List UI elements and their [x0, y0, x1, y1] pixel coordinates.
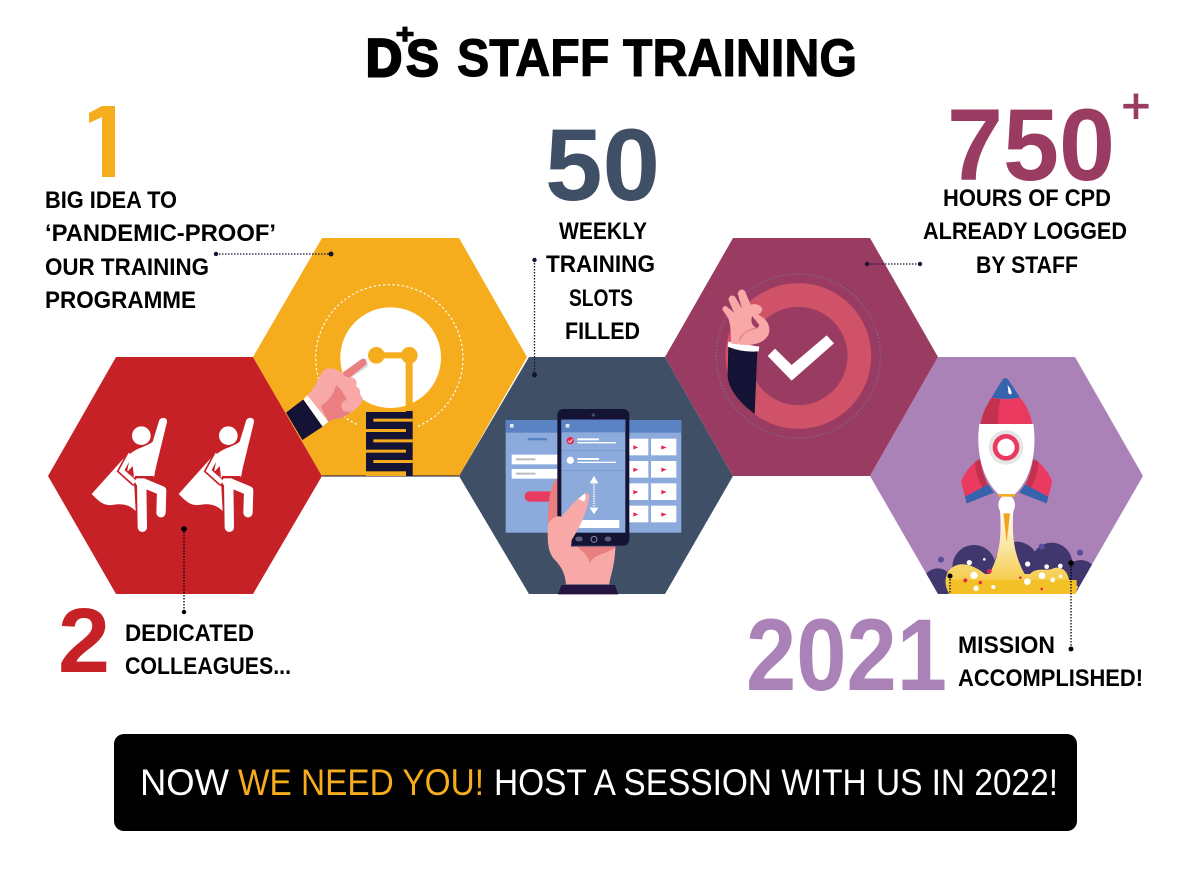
text: dedicated colleagues	[125, 620, 291, 680]
callout: number 1: 1	[78, 87, 134, 199]
text: weekly slots: FILLED	[565, 318, 640, 345]
text: CPD hours: ALREADY LOGGED	[923, 218, 1127, 245]
hexagon: purple rocket	[870, 357, 1143, 598]
logo: S	[406, 30, 439, 88]
banner: call to action	[114, 734, 1077, 831]
banner text: WE NEED YOU!	[238, 762, 484, 803]
text: mission accomplished: MISSION	[958, 632, 1055, 659]
callout: number 750 plus: +	[1121, 78, 1151, 134]
text: CPD hours	[923, 185, 1127, 279]
icon: superhero 2	[179, 418, 254, 527]
title	[366, 19, 857, 88]
text: mission accomplished: ACCOMPLISHED!	[958, 665, 1143, 692]
banner text: HOST A SESSION WITH US IN 2022!	[494, 762, 1058, 803]
icon: light bulb and hand	[286, 285, 463, 476]
callout: number 50: 50	[545, 108, 660, 222]
icon: check ring and OK hand	[716, 274, 880, 438]
icon: rocket launch	[923, 378, 1097, 598]
text: dedicated colleagues: DEDICATED	[125, 620, 254, 647]
heading text: STAFF TRAINING	[457, 29, 857, 88]
text: CPD hours: BY STAFF	[976, 252, 1078, 279]
text: big idea: OUR TRAINING	[45, 254, 209, 281]
text: weekly slots: SLOTS	[569, 285, 633, 312]
callout: number 750 plus: 750	[947, 88, 1115, 202]
text: mission accomplished	[958, 632, 1143, 692]
text: big idea: PROGRAMME	[45, 287, 196, 314]
logo: D	[366, 29, 402, 88]
hexagon: red superheroes	[48, 357, 322, 594]
callout: number 1	[89, 106, 115, 177]
logo	[366, 19, 439, 88]
connector: colleagues to hexagon	[181, 526, 187, 614]
text: weekly slots	[546, 218, 655, 345]
text: weekly slots: TRAINING	[546, 251, 655, 278]
hexagon: maroon checkmark	[665, 238, 938, 476]
text: weekly slots: WEEKLY	[559, 218, 647, 245]
connector: slots to hexagon	[532, 258, 537, 378]
connector: big idea to hexagon	[214, 252, 334, 256]
connector: mission to hexagon	[948, 560, 1074, 652]
logo: +	[396, 19, 414, 49]
hexagon: slate phone training slots	[459, 357, 733, 594]
banner text: NOW	[140, 762, 229, 803]
icon: superhero 1	[92, 418, 167, 527]
hexagon: yellow light bulb	[253, 238, 527, 476]
text: CPD hours: HOURS OF CPD	[943, 185, 1111, 212]
text: big idea: BIG IDEA TO	[45, 187, 177, 214]
callout: number 2: 2	[58, 590, 110, 692]
callout: number 2021: 2021	[746, 598, 947, 712]
text: big idea	[45, 187, 276, 314]
text: dedicated colleagues: COLLEAGUES...	[125, 653, 291, 680]
connector: CPD to hexagon	[865, 262, 922, 266]
text: big idea: ‘PANDEMIC-PROOF’	[45, 220, 276, 247]
icon: phone with app screens in hand	[506, 409, 681, 594]
